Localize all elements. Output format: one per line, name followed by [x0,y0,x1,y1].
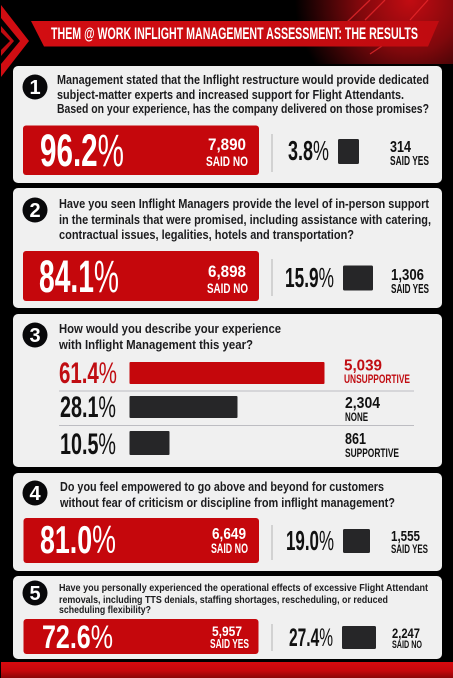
question 4 text: Do you feel empowered to go above and beyond for customers [60,479,384,494]
red result bar: 84.1% said no: 6,898 [208,262,246,281]
question 1 text [57,72,429,116]
row: 28.1% none: NONE [345,410,368,424]
panel: question 2 [13,188,442,308]
icon: number 4: 4 [29,483,41,505]
red result bar: 96.2% said no: SAID NO [206,153,248,169]
row: 28.1% none: 2,304 [345,395,380,412]
result: 19.0% said yes: SAID YES [391,542,428,556]
question 5 text: removals, including TTS denials, staffing shortages, rescheduling, or reduced [59,594,388,606]
red result bar: 81.0% said no: SAID NO [211,541,248,556]
icon: left chevrons [1,5,29,77]
row: 10.5% supportive: 861 [345,431,366,448]
result: 3.8% said yes: 3.8% [288,135,329,166]
result: 27.4% said no: SAID NO [392,639,422,651]
question 2 text: contractual issues, legalities, hotels and transportation? [59,227,354,242]
red result bar: 72.6% said yes: 5,957 [212,623,242,639]
result: 15.9% said yes [285,262,429,296]
row: 61.4% unsupportive: UNSUPPORTIVE [344,372,410,386]
red result bar: 81.0% said no: 81.0% [40,519,116,562]
red result bar: 81.0% said no: 6,649 [212,526,246,543]
question 5 text [59,582,428,616]
question 2 text [59,196,431,242]
row: 61.4% unsupportive [59,357,410,390]
icon: number 5: 5 [29,583,41,605]
panel: question 1 [13,66,442,183]
row: 28.1% none [60,391,380,424]
question 5 text: scheduling flexibility? [59,604,151,616]
red result bar: 72.6% said yes [24,619,258,655]
icon: number 2 [22,198,48,222]
result: 15.9% said yes: 15.9% [285,262,334,293]
result: 15.9% said yes: SAID YES [391,282,429,296]
footer band [1,662,453,678]
red result bar: 84.1% said no [23,251,259,302]
row: 61.4% unsupportive: 5,039 [344,358,382,374]
result: 19.0% said yes: 1,555 [391,529,420,545]
icon: number 1 [22,74,48,100]
question 3 text [58,321,281,352]
title banner [31,21,439,46]
result: 3.8% said yes: SAID YES [390,154,429,168]
result: 3.8% said yes [288,135,429,168]
result: 19.0% said yes: 19.0% [286,525,334,556]
red result bar: 96.2% said no: 96.2% [40,125,124,176]
row: 10.5% supportive [60,428,399,461]
result: 27.4% said no: 2,247 [392,625,420,641]
icon: number 5 [22,580,48,606]
icon: number 3: 3 [29,325,41,347]
panel: question 5 [13,576,442,659]
red result bar: 72.6% said yes: SAID YES [210,637,249,651]
red result bar: 84.1% said no: 84.1% [39,251,119,302]
icon: number 1: 1 [29,77,41,99]
result: 15.9% said yes: 1,306 [391,267,424,284]
row: 61.4% unsupportive: 61.4% [59,357,117,390]
background glow: top right streaks [290,0,453,64]
question 3 text: How would you describe your experience [59,321,281,336]
red result bar: 72.6% said yes: 72.6% [42,619,113,655]
red result bar: 81.0% said no [24,518,259,563]
result: 3.8% said yes: 314 [390,139,411,156]
row: 10.5% supportive: SUPPORTIVE [345,446,399,460]
panel: question 3 [13,314,442,467]
icon: number 4 [22,480,48,506]
result: 19.0% said yes [286,525,428,556]
row: 10.5% supportive: 10.5% [60,428,116,461]
red result bar: 84.1% said no: SAID NO [207,280,248,296]
result: 27.4% said no: 27.4% [289,624,333,652]
icon: number 3 [22,322,48,348]
result: 27.4% said no [289,624,422,652]
question 4 text: without fear of criticism or discipline from inflight management? [59,495,395,510]
icon: number 2: 2 [29,200,41,222]
row: 28.1% none: 28.1% [60,391,116,424]
red result bar: 96.2% said no: 7,890 [208,135,246,154]
question 3 text: with Inflight Management this year? [58,337,253,352]
question 4 text [59,479,395,510]
panel: question 4 [13,473,442,571]
red result bar: 96.2% said no [23,125,259,176]
